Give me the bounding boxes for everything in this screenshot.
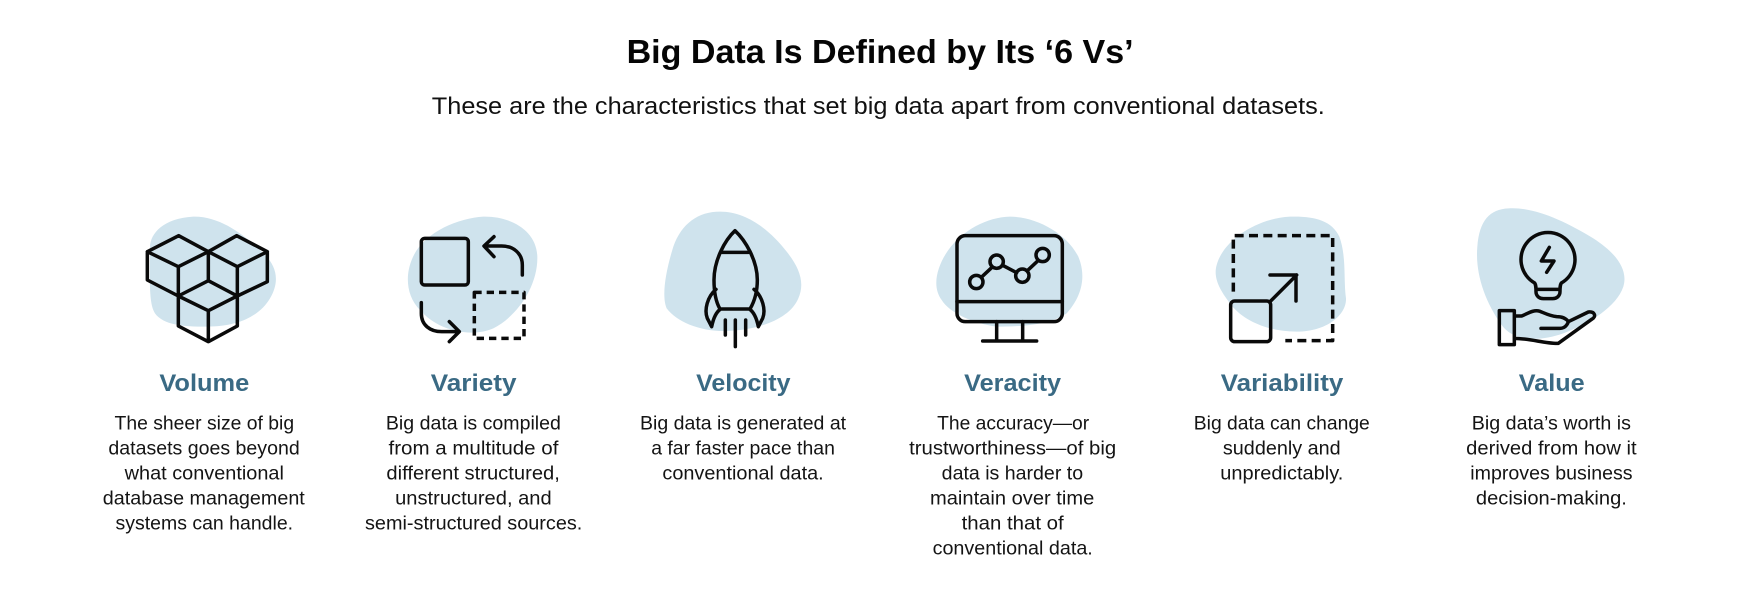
text: variety description: from a multitude of (388, 438, 559, 460)
text: volume description: what conventional (124, 462, 284, 484)
icon: rocket (664, 212, 801, 347)
text: volume description: database management (103, 488, 305, 510)
text: veracity description (909, 412, 1116, 560)
panel: velocity (640, 212, 847, 484)
text: velocity description (640, 412, 847, 484)
panel: value (1466, 208, 1637, 510)
heading: Variability: Variability (1221, 370, 1344, 397)
text: volume description: datasets goes beyond (108, 438, 300, 460)
heading: Veracity: Veracity (964, 370, 1062, 397)
text: veracity description: data is harder to (942, 462, 1083, 484)
text: volume description: The sheer size of big (114, 412, 294, 434)
text: variability description: unpredictably. (1220, 462, 1343, 484)
icon: square and dashed square with arrows (408, 217, 537, 342)
panel: volume (103, 217, 305, 534)
icon: square expanding to dashed square (1216, 217, 1346, 342)
text: veracity description: The accuracy—or (937, 412, 1090, 434)
subtitle: These are the characteristics that set big data apart from conventional datasets. (432, 93, 1325, 120)
title: Big Data Is Defined by Its ‘6 Vs’ (627, 34, 1134, 71)
text: value description: derived from how it (1466, 438, 1637, 460)
heading: Volume: Volume (159, 370, 249, 397)
icon: stacked cubes (147, 217, 276, 342)
text: value description: decision-making. (1476, 488, 1627, 510)
text: variety description: Big data is compiled (386, 412, 561, 434)
text: volume description (103, 412, 305, 534)
text: veracity description: conventional data. (933, 538, 1093, 560)
text: variety description (365, 412, 582, 534)
text: variety description: semi-structured sources. (365, 512, 582, 534)
text: veracity description: maintain over time (930, 488, 1094, 510)
text: value description: improves business (1470, 462, 1633, 484)
text: veracity description: trustworthiness—of big (909, 438, 1116, 460)
heading: Velocity: Velocity (696, 370, 791, 397)
icon: hand holding light bulb (1477, 208, 1624, 345)
text: value description (1466, 412, 1637, 510)
text: variety description: different structured, (386, 462, 560, 484)
text: variability description: suddenly and (1223, 438, 1341, 460)
text: variability description: Big data can change (1194, 412, 1370, 434)
text: variability description (1194, 412, 1370, 484)
icon: monitor with line chart (936, 217, 1082, 341)
text: velocity description: Big data is generated at (640, 412, 847, 434)
heading: Variety: Variety (431, 370, 517, 397)
heading: Value: Value (1519, 370, 1585, 397)
text: velocity description: a far faster pace than (651, 438, 835, 460)
text: veracity description: than that of (962, 512, 1064, 534)
panel: variety (365, 217, 582, 534)
text: velocity description: conventional data. (662, 462, 824, 484)
panel: veracity (909, 217, 1116, 560)
text: value description: Big data’s worth is (1472, 412, 1631, 434)
panel: variability (1194, 217, 1370, 484)
text: volume description: systems can handle. (116, 512, 293, 534)
text: variety description: unstructured, and (395, 488, 552, 510)
